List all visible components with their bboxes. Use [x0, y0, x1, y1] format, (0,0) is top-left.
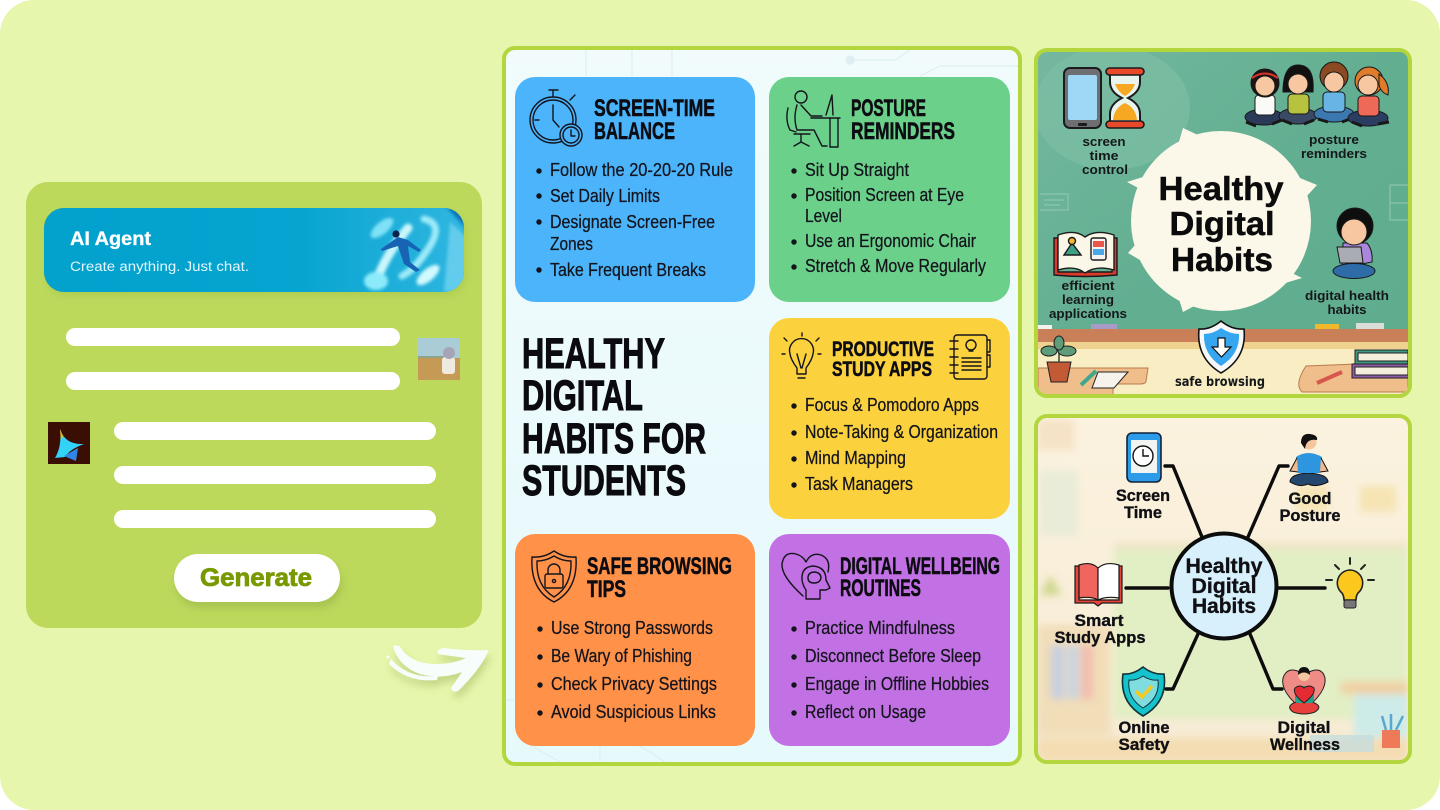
panel: mind map poster: [1036, 416, 1410, 762]
label: [1049, 278, 1127, 321]
banner subtitle: Create anything. Just chat.: [70, 259, 249, 274]
heading: SAFE BROWSING: [587, 553, 732, 580]
heading: [594, 95, 715, 145]
label: screen time: Screen: [1116, 486, 1170, 505]
icon: notepad and pencil: [1081, 371, 1128, 388]
badge title: Healthy: [1158, 170, 1284, 207]
tips list: [791, 395, 998, 494]
tips list: Level: [805, 206, 842, 226]
center burst badge: [1127, 128, 1317, 312]
heading: [832, 338, 934, 381]
generate button: [174, 554, 340, 602]
icon: light bulb: [782, 333, 821, 378]
icon: hourglass: [1106, 68, 1144, 128]
label: learning: [1062, 292, 1114, 307]
tips list: [791, 160, 986, 276]
icon: potted plant: [1041, 336, 1076, 382]
icon: heart with head: [782, 553, 830, 599]
tips list: Take Frequent Breaks: [550, 260, 706, 280]
icon: notebook: [950, 335, 990, 379]
icon: meditating person: [1290, 434, 1328, 486]
heading: SCREEN-TIME: [594, 95, 715, 122]
label: digital wellness: Wellness: [1270, 735, 1340, 754]
label: [1082, 134, 1128, 177]
tips list: Note-Taking & Organization: [805, 422, 998, 442]
heading: PRODUCTIVE: [832, 338, 934, 361]
main title: HEALTHY: [522, 330, 665, 378]
tips list: Zones: [550, 234, 593, 254]
heading: TIPS: [587, 576, 626, 603]
badge title: Digital: [1170, 205, 1274, 242]
tips list: [537, 618, 717, 722]
label: posture: [1309, 132, 1359, 147]
tips list: Designate Screen-Free: [550, 212, 715, 232]
icon: light bulb: [1326, 558, 1374, 608]
label: good posture: [1280, 489, 1340, 525]
heading: REMINDERS: [851, 118, 955, 145]
icon: phone with clock: [1127, 433, 1161, 482]
label: online safety: Online: [1118, 718, 1170, 737]
label: applications: [1049, 306, 1127, 321]
main title: DIGITAL: [522, 372, 643, 420]
tips list: Position Screen at Eye: [805, 185, 964, 205]
icon: smartphone: [1064, 68, 1101, 128]
label: [1305, 288, 1389, 317]
mind map connectors: [1126, 466, 1325, 689]
main title: [522, 330, 706, 505]
icon: boy with laptop: [1333, 208, 1375, 278]
blurred classroom backdrop: [1038, 420, 1408, 762]
tips list: Engage in Offline Hobbies: [805, 674, 989, 694]
desk and shelf: [1038, 323, 1408, 395]
panel: main infographic: [504, 48, 1020, 764]
label: control: [1082, 162, 1128, 177]
tips list: Disconnect Before Sleep: [805, 646, 981, 666]
tips list: Reflect on Usage: [805, 702, 926, 722]
main title: HABITS FOR: [522, 415, 706, 463]
heading: [587, 553, 732, 603]
panel: chalkboard poster: [1034, 46, 1410, 396]
label: smart study apps: [1054, 611, 1146, 647]
label: time: [1090, 148, 1118, 163]
icon: stacked books: [1352, 350, 1410, 378]
label: smart study apps: Smart: [1074, 611, 1124, 630]
label: digital wellness: [1270, 718, 1340, 754]
heading: [851, 95, 955, 145]
tips list: [791, 618, 989, 722]
label: [1301, 132, 1367, 161]
heading: DIGITAL WELLBEING: [840, 553, 1000, 580]
card: posture reminders: [769, 77, 1010, 302]
arrow: prompt to results: [386, 645, 489, 692]
agent logo: [48, 422, 90, 464]
heading: ROUTINES: [840, 575, 921, 602]
tips list: Be Wary of Phishing: [551, 646, 692, 666]
heading: [840, 553, 1000, 602]
tips list: Set Daily Limits: [550, 186, 660, 206]
label: efficient: [1062, 278, 1115, 293]
user avatar photo: [418, 338, 460, 380]
card: productive study apps: [769, 318, 1010, 519]
icon: person at desk with chair: [787, 91, 840, 147]
tips list: Avoid Suspicious Links: [551, 702, 716, 722]
label: habits: [1328, 302, 1366, 317]
generate button: Generate: [200, 564, 312, 592]
mind map hub: Habits: [1192, 595, 1256, 618]
card: screen-time balance: [515, 77, 755, 302]
icon: four seated children: [1245, 62, 1389, 126]
label: digital health: [1305, 288, 1389, 303]
tips list: Use an Ergonomic Chair: [805, 231, 976, 251]
label: online safety: Safety: [1118, 735, 1170, 754]
mind map hub: Digital: [1192, 575, 1256, 598]
tips list: Stretch & Move Regularly: [805, 256, 986, 276]
label: good posture: Good: [1288, 489, 1332, 508]
label: smart study apps: Study Apps: [1054, 628, 1146, 647]
icon: red book: [1075, 564, 1122, 606]
heading: STUDY APPS: [832, 358, 932, 381]
icon: stopwatch: [530, 90, 582, 146]
card: digital wellbeing routines: [769, 534, 1010, 746]
icon: safe browsing shield: [1199, 321, 1244, 373]
label: screen: [1082, 134, 1126, 149]
label: screen time: Time: [1124, 503, 1162, 522]
label: safe browsing: [1175, 375, 1265, 390]
mind map hub: [1172, 534, 1276, 638]
agent response placeholder lines: [114, 422, 436, 528]
label: good posture: Posture: [1280, 506, 1340, 525]
tips list: Focus & Pomodoro Apps: [805, 395, 979, 415]
tips list: Task Managers: [805, 474, 913, 494]
tips list: Check Privacy Settings: [551, 674, 717, 694]
badge title: [1158, 170, 1284, 278]
tips list: Follow the 20-20-20 Rule: [550, 160, 733, 180]
user message placeholder lines: [66, 328, 400, 390]
badge title: Habits: [1171, 241, 1273, 278]
panel: AI agent prompt card: [26, 182, 482, 628]
tips list: Mind Mapping: [805, 448, 906, 468]
tips list: Practice Mindfulness: [805, 618, 955, 638]
tips list: [536, 160, 733, 280]
heading: POSTURE: [851, 95, 926, 122]
heading: BALANCE: [594, 118, 675, 145]
icon: wellness figure with heart: [1283, 667, 1325, 714]
icon: pencil and coins: [1317, 372, 1342, 383]
label: online safety: [1118, 718, 1170, 754]
label: digital wellness: Digital: [1278, 718, 1330, 737]
banner title: AI Agent: [70, 228, 152, 250]
tips list: Use Strong Passwords: [551, 618, 713, 638]
card: safe browsing tips: [515, 534, 755, 746]
label: screen time: [1116, 486, 1170, 522]
banner: AI Agent: [44, 204, 470, 292]
tips list: Sit Up Straight: [805, 160, 909, 180]
mind map hub: Healthy: [1186, 555, 1263, 578]
label: reminders: [1301, 146, 1367, 161]
icon: check shield: [1122, 667, 1165, 716]
main title: STUDENTS: [522, 457, 686, 505]
icon: open book: [1054, 232, 1117, 276]
icon: shield with lock: [532, 551, 576, 602]
